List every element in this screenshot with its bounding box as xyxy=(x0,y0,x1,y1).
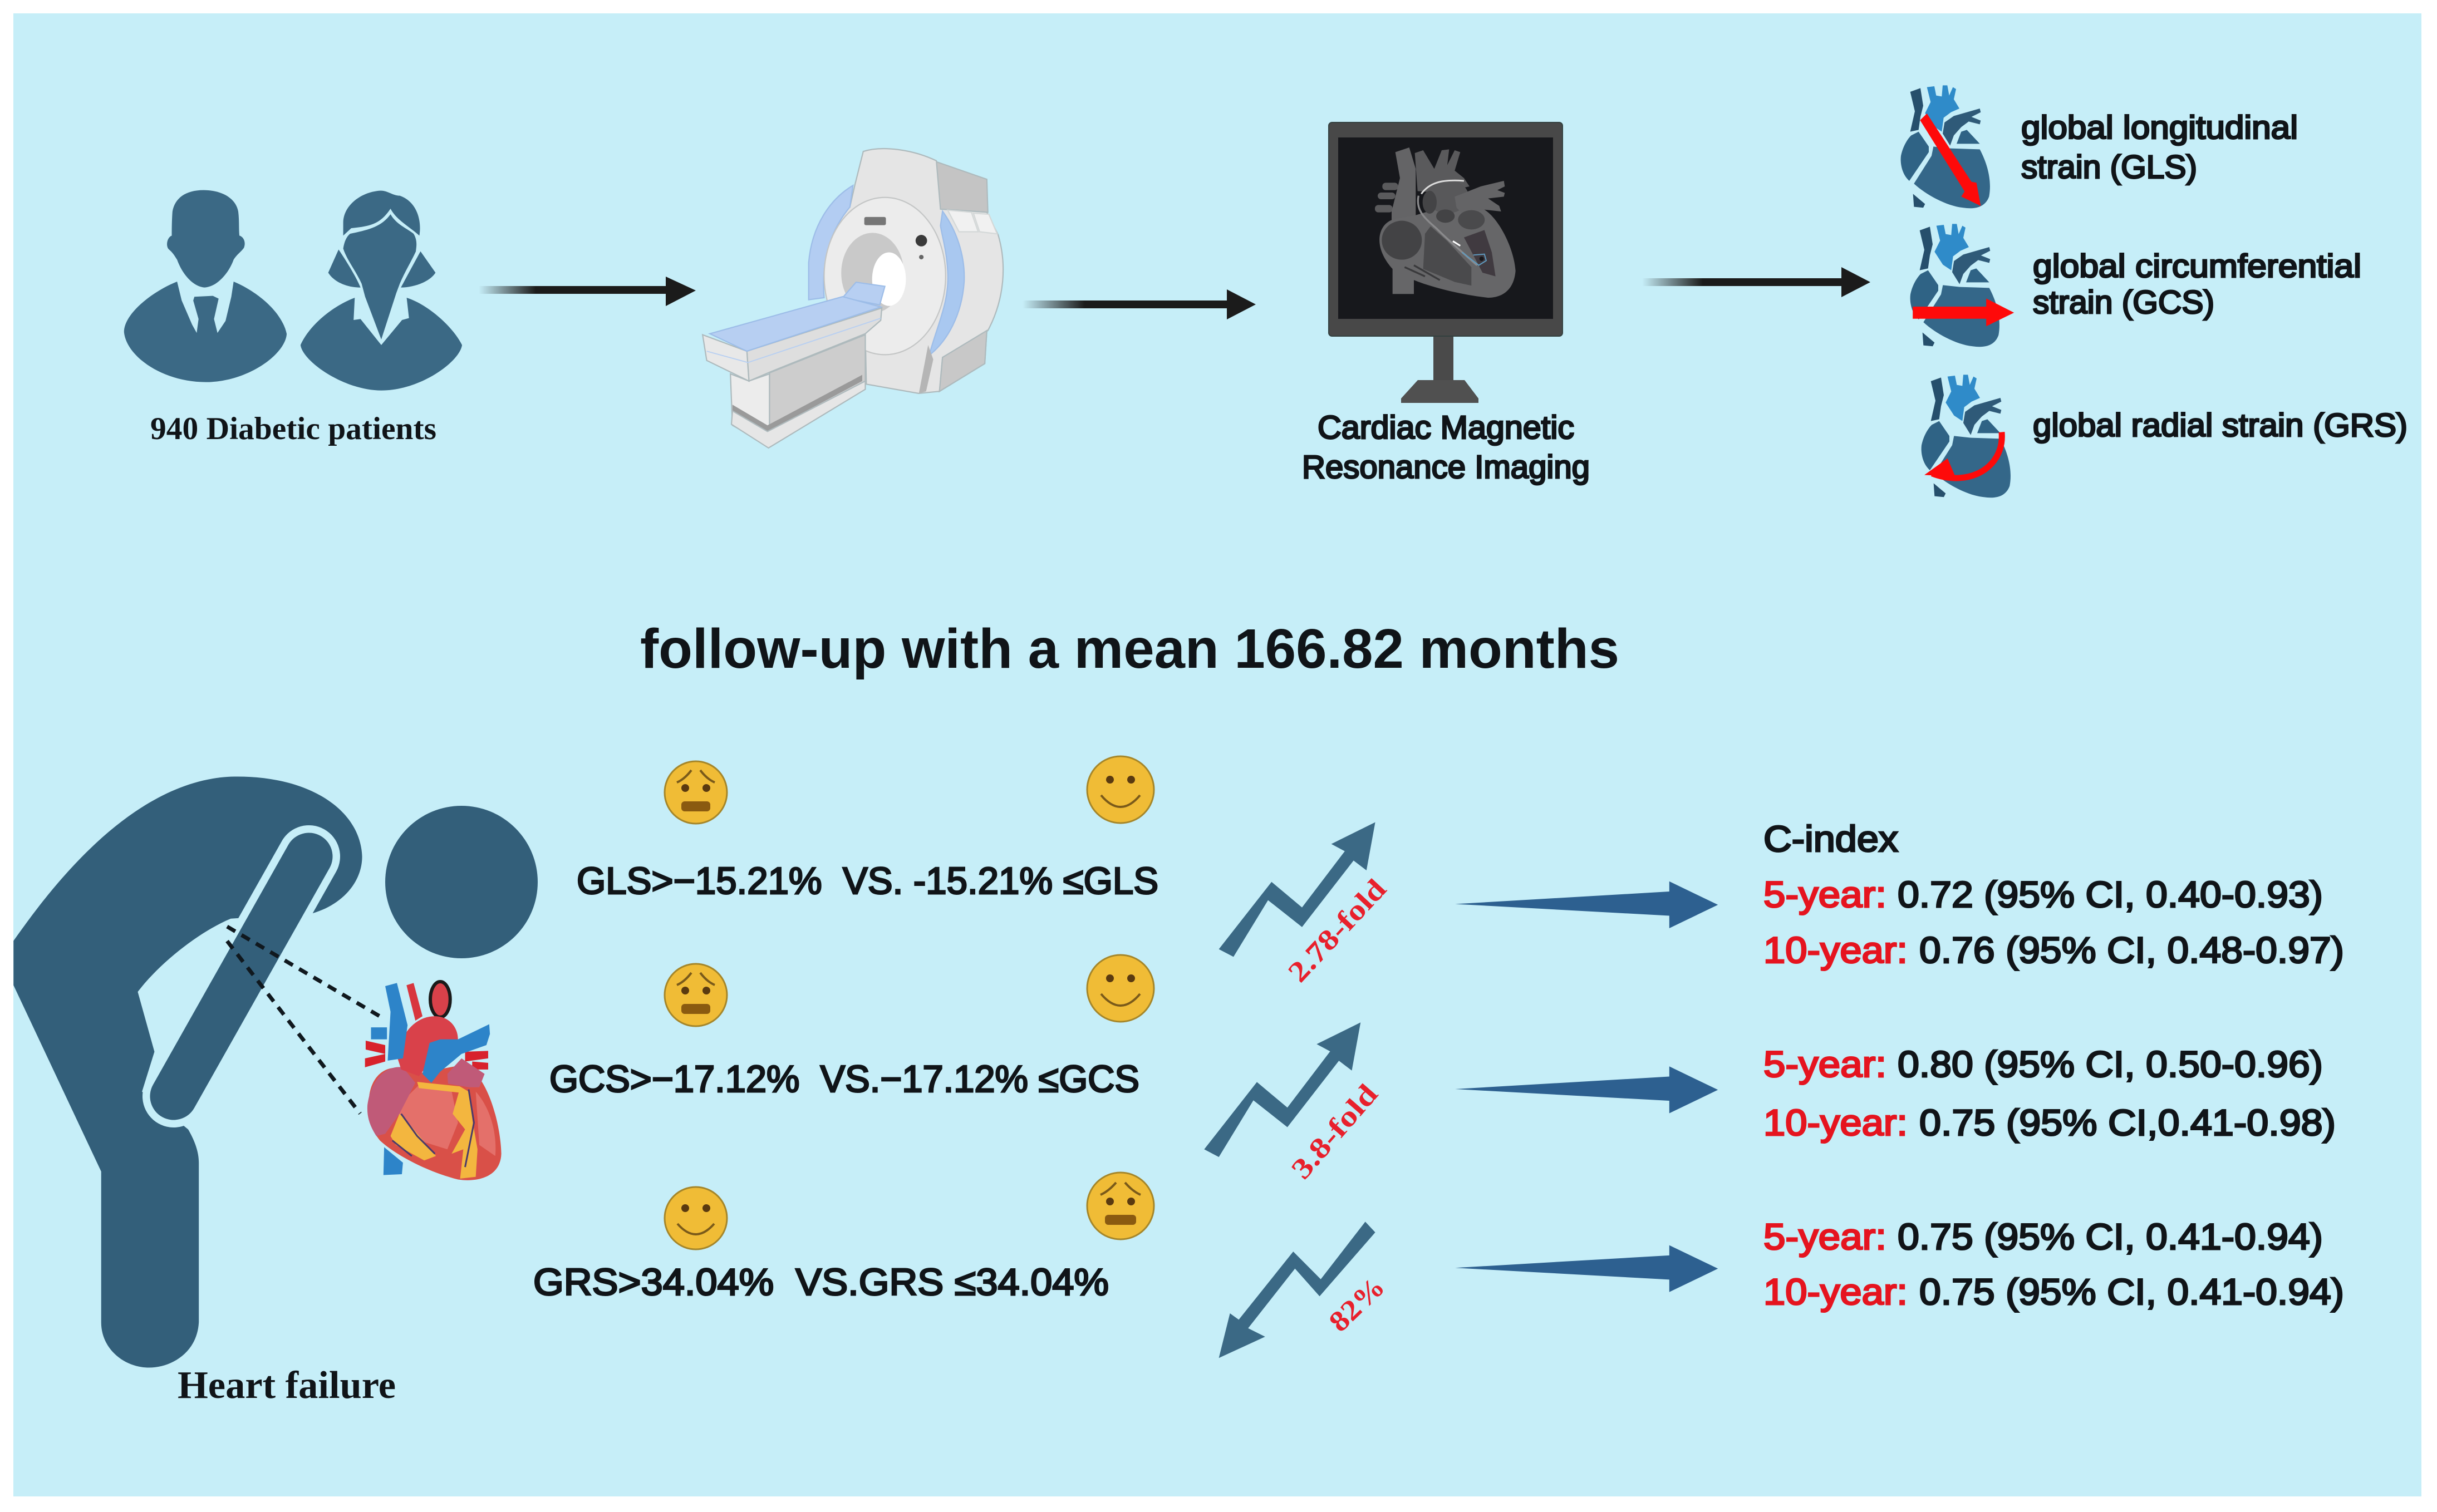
label: Cardiac Magnetic Resonance Imaging: Resonance Imaging xyxy=(1302,449,1590,485)
vessels behind xyxy=(365,982,488,1070)
icon: heart failure figure xyxy=(13,776,538,1368)
smiley: happy, GRS high xyxy=(665,1187,727,1249)
label: global longitudinal strain (GLS): strain (GLS) xyxy=(2021,149,2197,185)
label: global circumferential strain (GCS): strain (GCS) xyxy=(2033,284,2214,321)
results: GLS C-index: 5-year: xyxy=(1763,874,1886,915)
icon: zigzag down arrow, GRS xyxy=(1219,1222,1375,1358)
label: global longitudinal strain (GLS) xyxy=(2021,110,2298,185)
results: GRS C-index: 0.75 (95% CI, 0.41-0.94) xyxy=(1898,1216,2323,1257)
coronary arteries xyxy=(391,1082,478,1179)
results: GLS C-index xyxy=(1763,874,2344,971)
icon: CMR monitor xyxy=(1329,122,1563,403)
aorta xyxy=(397,1016,458,1076)
smiley: worried, GCS high xyxy=(665,964,727,1026)
label: 940 Diabetic patients: 940 Diabetic patients xyxy=(150,411,436,446)
label: global circumferential strain (GCS) xyxy=(2033,248,2361,321)
smiley: worried, GRS low xyxy=(1087,1173,1154,1239)
icon: GCS heart xyxy=(1910,224,2014,347)
arrow: patients to scanner xyxy=(479,277,696,306)
comparison: GCS: GCS>−17.12% VS.−17.12% ≤GCS xyxy=(549,1058,1139,1100)
lines: zoom from chest to heart xyxy=(227,927,380,1114)
label: 82%: 82% xyxy=(1323,1271,1391,1338)
arm xyxy=(174,856,309,1096)
smiley: happy, GLS low xyxy=(1087,756,1154,823)
icon: diabetic patients, man and woman xyxy=(124,190,462,391)
results: GRS C-index: 0.75 (95% CI, 0.41-0.94) xyxy=(1919,1271,2344,1312)
comparison: GLS: GLS>−15.21% VS. -15.21% ≤GLS xyxy=(577,860,1158,902)
label: 3.8-fold: 3.8-fold xyxy=(1285,1078,1384,1185)
icon: zigzag up arrow, GLS xyxy=(1219,823,1375,957)
results: GLS C-index: 0.76 (95% CI, 0.48-0.97) xyxy=(1919,929,2344,971)
icon: GLS heart xyxy=(1901,85,1990,208)
label: global circumferential strain (GCS): global circumferential xyxy=(2033,248,2361,284)
results: GRS C-index: 5-year: xyxy=(1763,1216,1886,1257)
arm outline xyxy=(174,856,309,1096)
arrow: to GCS C-index xyxy=(1455,1066,1718,1113)
arrow: scanner to imaging xyxy=(1023,289,1256,319)
arrow: to GLS C-index xyxy=(1455,881,1718,928)
arrow: imaging to strain xyxy=(1642,267,1870,297)
results: GRS C-index xyxy=(1763,1216,2344,1312)
results: GCS C-index: 5-year: xyxy=(1763,1043,1886,1085)
smiley: worried, GLS high xyxy=(665,761,727,824)
icon: woman xyxy=(301,191,462,391)
comparison: GRS: GRS>34.04% VS.GRS ≤34.04% xyxy=(533,1261,1109,1303)
results: GCS C-index: 0.75 (95% CI,0.41-0.98) xyxy=(1919,1102,2336,1143)
icon: zigzag up arrow, GCS xyxy=(1204,1022,1360,1157)
pulmonary artery xyxy=(422,1025,490,1083)
head xyxy=(385,806,538,958)
heart on screen xyxy=(1375,147,1516,298)
label: Cardiac Magnetic Resonance Imaging: Cardiac Magnetic xyxy=(1318,410,1574,446)
icon: MRI scanner xyxy=(702,149,1003,448)
results: GCS C-index: 0.80 (95% CI, 0.50-0.96) xyxy=(1898,1043,2323,1085)
results: GRS C-index: 10-year: xyxy=(1763,1271,1908,1312)
right atrium xyxy=(367,1067,415,1136)
results: GCS C-index xyxy=(1763,1043,2336,1143)
patient table xyxy=(702,282,885,448)
smiley: happy, GCS low xyxy=(1087,955,1154,1022)
label: 2.78-fold: 2.78-fold xyxy=(1282,873,1393,988)
icon: anatomical heart xyxy=(365,982,502,1180)
label: Heart failure: Heart failure xyxy=(178,1364,396,1407)
heading: C-index: C-index xyxy=(1763,818,1898,859)
label: global longitudinal strain (GLS): global longitudinal xyxy=(2021,110,2298,146)
arrow: to GRS C-index xyxy=(1455,1245,1718,1292)
results: GLS C-index: 0.72 (95% CI, 0.40-0.93) xyxy=(1898,874,2323,915)
icon: man xyxy=(124,190,287,382)
label: global radial strain (GRS): global radial strain (GRS) xyxy=(2033,407,2407,444)
vena cava xyxy=(385,983,407,1061)
left atrium xyxy=(448,1058,485,1087)
ventricles xyxy=(368,1065,502,1180)
icon: GRS heart xyxy=(1922,375,2011,498)
label: Cardiac Magnetic Resonance Imaging xyxy=(1302,410,1590,485)
heading: follow-up: follow-up with a mean 166.82 months xyxy=(640,618,1619,680)
results: GLS C-index: 10-year: xyxy=(1763,929,1908,971)
figure body xyxy=(13,776,362,1368)
results: GCS C-index: 10-year: xyxy=(1763,1102,1908,1143)
